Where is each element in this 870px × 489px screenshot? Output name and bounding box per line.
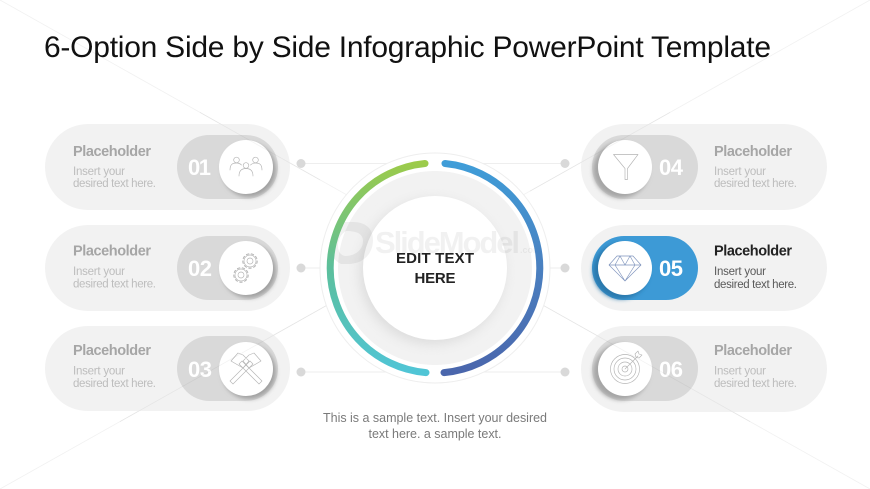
text: option 06 [714,343,797,390]
text: option 01: Insert your [73,166,125,178]
text: option 02 [73,244,156,290]
number 04: 04 [659,155,684,180]
center label: HERE [414,270,456,287]
caption: This is a sample text. Insert your desired [323,411,547,425]
text: option 06: Insert your [714,366,766,378]
number 01: 01 [188,155,211,180]
panel: option 01 [45,124,290,210]
text: option 04 [714,144,797,190]
number 02: 02 [188,256,212,281]
panel: option 05 (highlighted) [581,225,827,311]
text: option 06: Placeholder [714,343,792,359]
center circle [320,153,550,383]
text: option 03 [73,343,156,390]
number 06: 06 [659,357,683,382]
panel: option 04 [581,124,827,210]
text: option 02: desired text here. [73,278,156,290]
text: option 05 [714,244,797,291]
center label [396,250,474,287]
text: option 01: desired text here. [73,178,156,190]
panel: option 03 [45,326,290,411]
text: option 04: desired text here. [714,178,797,190]
text: option 05: Insert your [714,266,766,278]
arc: blue [444,164,540,373]
caption: text here. a sample text. [368,427,502,441]
text: option 03: Insert your [73,366,125,378]
text: option 01 [73,144,156,190]
watermark: .com [520,245,541,255]
text: option 03: desired text here. [73,378,156,390]
icon: funnel [614,154,638,180]
diagonal lines over panels [120,112,750,422]
panel: option 06 [581,326,827,412]
text: option 02: Placeholder [73,244,151,260]
icon: gears [234,254,257,282]
icon: people [230,157,262,176]
connector lines and dots [296,159,570,376]
panel: option 02 [45,225,290,311]
caption [323,411,547,441]
text: option 02: Insert your [73,266,125,278]
text: option 01: Placeholder [73,144,151,160]
icon: diamond [609,256,641,281]
watermark: SlideModel [375,225,520,260]
watermark [331,222,541,264]
icon: target [610,351,642,384]
number 03: 03 [188,357,212,382]
text: option 04: Placeholder [714,144,792,160]
text: option 04: Insert your [714,166,766,178]
text: option 05: Placeholder [714,244,792,260]
text: option 03: Placeholder [73,343,151,359]
center label: EDIT TEXT [396,250,474,267]
arc: green to teal [330,164,426,373]
number 05: 05 [659,256,683,281]
icon: crossed hammers [230,353,262,384]
text: option 06: desired text here. [714,378,797,390]
text: option 05: desired text here. [714,279,797,291]
title: 6-Option Side by Side Infographic PowerPoint Template [44,31,771,64]
